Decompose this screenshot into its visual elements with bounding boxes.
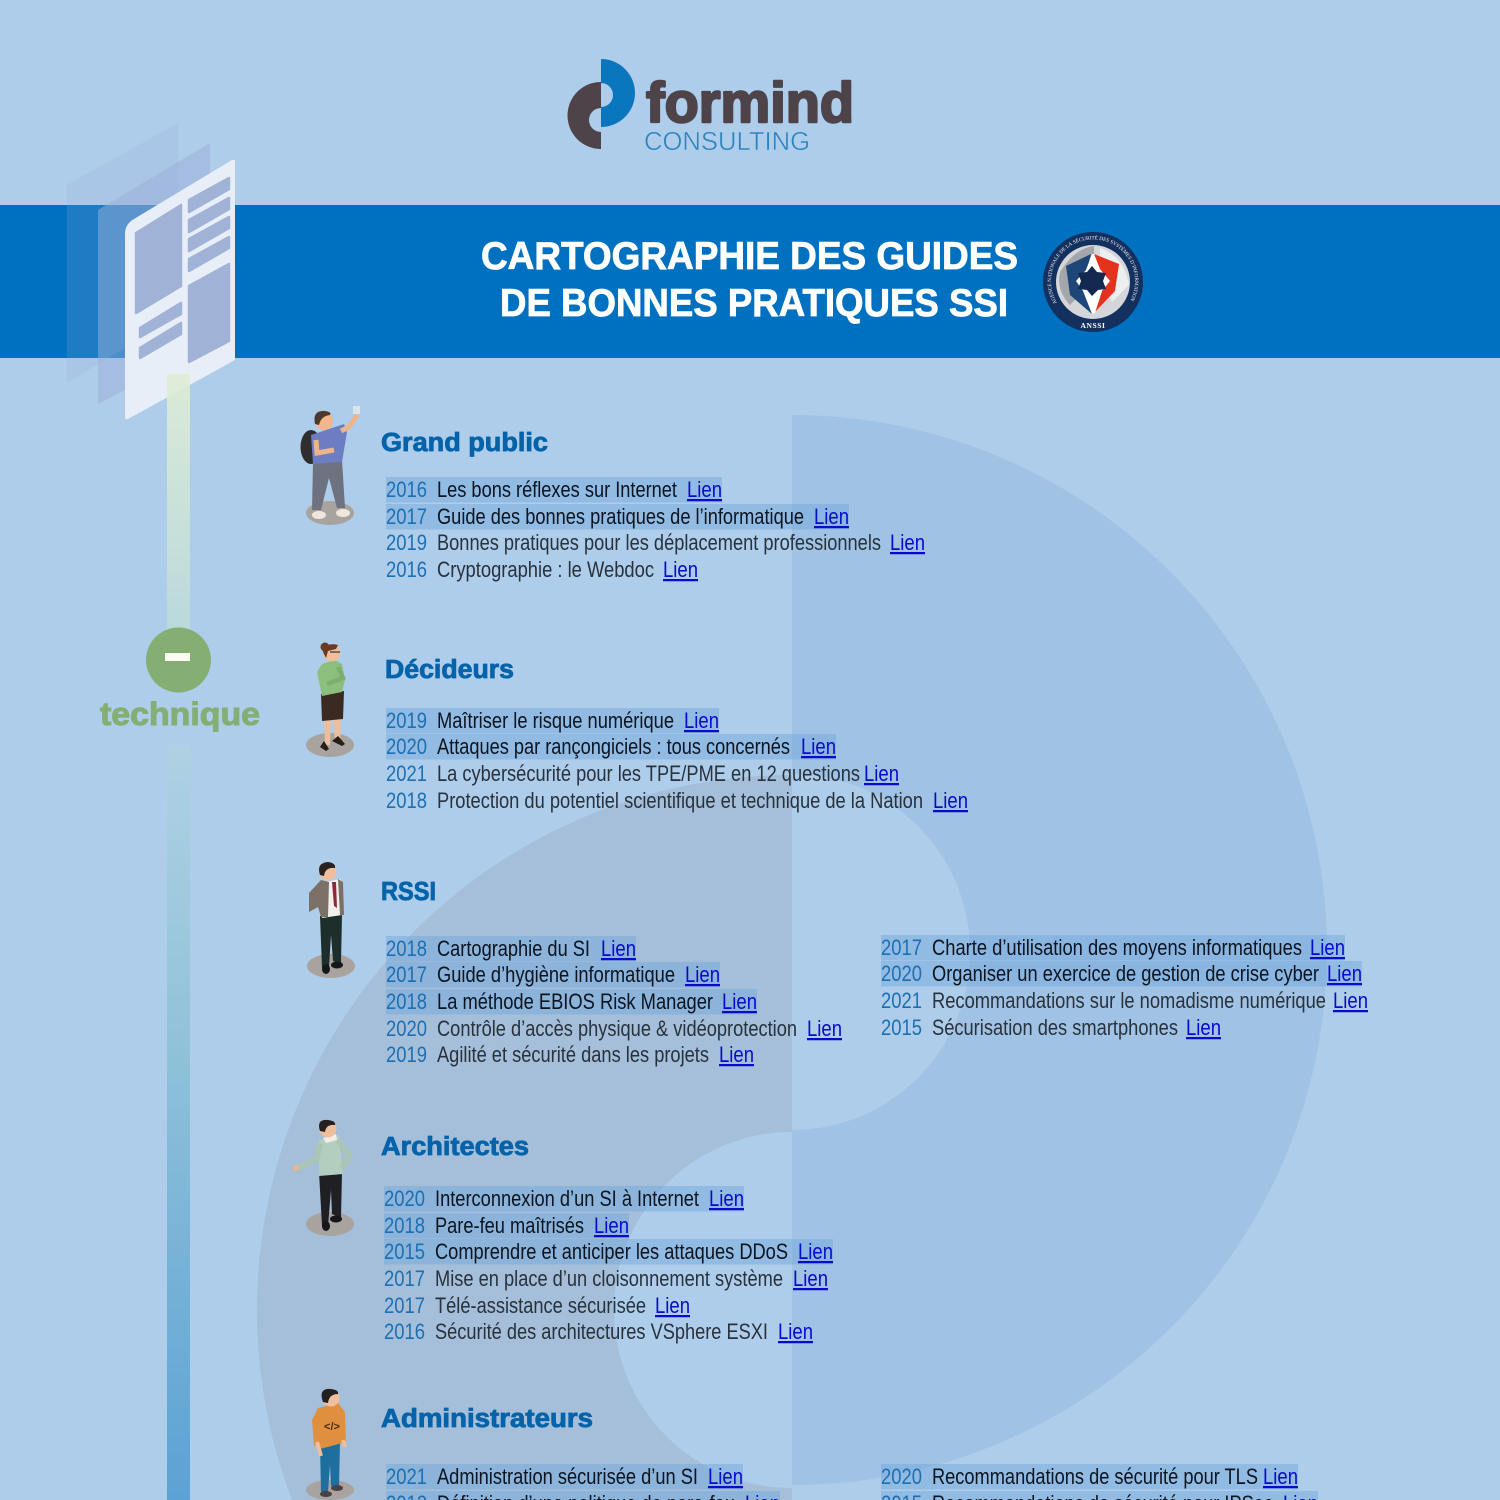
heading: Décideurs: Décideurs [385,656,514,684]
guides list: Décideurs [386,708,968,813]
figure: RSSI man in suit [307,862,355,978]
header band [0,205,1500,358]
logo wordmark: formind [646,71,854,135]
timeline bar: bottom segment [167,745,190,1500]
guides list: Architectes: 2017 [384,1293,425,1318]
guides list: Décideurs: Lien [684,708,719,733]
guides list: Grand public: 2016 [386,557,427,582]
guides list: Architectes: Lien [709,1186,744,1211]
guides list: Architectes: 2020 [384,1186,425,1211]
guides list: Décideurs: 2019 [386,708,427,733]
guides list: RSSI left column: 2018 [386,989,427,1014]
guides list: Administrateurs right column: 2020 [881,1464,922,1489]
guides list: Architectes: Comprendre et anticiper les attaques DDoS [435,1239,788,1264]
guides list: Grand public: Lien [890,530,925,555]
guides list: Administrateurs left column: Administration sécurisée d’un SI [437,1464,698,1489]
guides list: RSSI right column: 2015 [881,1015,922,1040]
guides list: RSSI left column [386,936,842,1067]
guides list: RSSI right column: Recommandations sur le nomadisme numérique [932,988,1326,1013]
guides list: Administrateurs right column [881,1464,1318,1500]
figure: grand public traveller [300,406,360,525]
guides list: Grand public: 2016 [386,477,427,502]
guides list: Grand public [386,477,925,582]
figure: décideuse [306,642,354,757]
guides list: Décideurs: 2018 [386,788,427,813]
guides list: RSSI right column: Lien [1333,988,1368,1013]
guides list: RSSI right column: Organiser un exercice de gestion de crise cyber [932,961,1319,986]
heading: Architectes: Architectes [381,1133,529,1161]
guides list: RSSI right column: 2020 [881,961,922,986]
guides list: Administrateurs right column: Lien [1263,1464,1298,1489]
guides list: Architectes: Pare-feu maîtrisés [435,1213,584,1238]
figure: architecte [293,1120,354,1236]
guides list: RSSI left column: Contrôle d’accès physique & vidéoprotection [437,1016,797,1041]
watermark: giant formind logo [257,415,1327,1500]
guides list: Grand public: 2017 [386,504,427,529]
guides list: Grand public: Lien [814,504,849,529]
guides list: RSSI right column: 2021 [881,988,922,1013]
heading: RSSI: RSSI [381,878,436,906]
label: technique: technique [100,696,260,732]
guides list: Grand public: Guide des bonnes pratiques de l’informatique [437,504,804,529]
marker: minus technique [146,628,211,692]
guides list: Architectes: 2018 [384,1213,425,1238]
guides list: RSSI left column: Lien [601,936,636,961]
guides list: RSSI left column: Lien [685,962,720,987]
guides list: Grand public: Cryptographie : le Webdoc [437,557,654,582]
guides list: Grand public: Les bons réflexes sur Internet [437,477,678,502]
guides list: Architectes [384,1186,833,1344]
guides list: RSSI left column: Lien [807,1016,842,1041]
icon: ANSSI seal: ANSSI [1080,321,1106,330]
guides list: Architectes: Lien [655,1293,690,1318]
guides list: RSSI right column: Sécurisation des smartphones [932,1015,1178,1040]
guides list: RSSI left column: 2020 [386,1016,427,1041]
title: CARTOGRAPHIE DES GUIDES [481,235,1018,278]
guides list: Grand public: 2019 [386,530,427,555]
guides list: Architectes: Lien [778,1319,813,1344]
guides list: Architectes: Mise en place d’un cloisonnement système [435,1266,783,1291]
guides list: RSSI left column: La méthode EBIOS Risk Manager [437,989,713,1014]
guides list: Décideurs: Lien [933,788,968,813]
guides list: Architectes: 2017 [384,1266,425,1291]
guides list: RSSI left column: 2017 [386,962,427,987]
icon: ANSSI seal: AGENCE NATIONALE DE LA SÉCURITÉ DES SYSTÈMES D’INFORMATION [1048,235,1138,304]
guides list: Architectes: 2015 [384,1239,425,1264]
guides list: Grand public: Lien [663,557,698,582]
figure: administrateur: </> [324,1421,340,1433]
guides list: RSSI right column: Charte d’utilisation des moyens informatiques [932,935,1302,960]
guides list: RSSI left column: Cartographie du SI [437,936,590,961]
figure: administrateur [306,1389,354,1500]
guides list: RSSI left column: 2018 [386,936,427,961]
guides list: RSSI left column: Guide d’hygiène informatique [437,962,675,987]
logo mark [568,59,635,149]
guides list: Administrateurs left column [386,1464,780,1500]
guides list: RSSI right column: Lien [1186,1015,1221,1040]
icon: stacked documents [67,123,235,419]
guides list: Administrateurs right column: Recommandations de sécurité pour TLS [932,1464,1258,1489]
icon: ANSSI seal [1043,232,1143,332]
guides list: Décideurs: Protection du potentiel scientifique et technique de la Nation [437,788,923,813]
heading: Administrateurs: Administrateurs [381,1405,593,1433]
guides list: Architectes: Lien [798,1239,833,1264]
guides list: RSSI right column: Lien [1327,961,1362,986]
guides list: Décideurs: Lien [801,734,836,759]
guides list: Grand public: Lien [687,477,722,502]
heading: Grand public: Grand public [381,429,548,457]
guides list: RSSI left column: 2019 [386,1042,427,1067]
guides list: Décideurs: La cybersécurité pour les TPE/PME en 12 questions [437,761,860,786]
guides list: Architectes: Interconnexion d’un SI à Internet [435,1186,700,1211]
guides list: Architectes: Lien [594,1213,629,1238]
guides list: Architectes: Télé-assistance sécurisée [435,1293,646,1318]
guides list: Décideurs: 2020 [386,734,427,759]
guides list: Décideurs: Lien [864,761,899,786]
title [481,235,1018,325]
logo subtitle: CONSULTING [644,128,810,156]
guides list: Décideurs: Maîtriser le risque numérique [437,708,674,733]
guides list: Administrateurs left column: 2021 [386,1464,427,1489]
guides list: RSSI right column: 2017 [881,935,922,960]
guides list: RSSI left column: Agilité et sécurité dans les projets [437,1042,709,1067]
guides list: RSSI right column [881,935,1368,1040]
timeline bar: top segment [167,374,190,630]
guides list: Décideurs: 2021 [386,761,427,786]
guides list: Architectes: 2016 [384,1319,425,1344]
guides list: Décideurs: Attaques par rançongiciels : tous concernés [437,734,790,759]
guides list: RSSI left column: Lien [722,989,757,1014]
title: DE BONNES PRATIQUES SSI [500,282,1008,325]
guides list: Grand public: Bonnes pratiques pour les déplacement professionnels [437,530,881,555]
guides list: RSSI right column: Lien [1310,935,1345,960]
logo: formind consulting [568,59,854,156]
guides list: Architectes: Sécurité des architectures VSphere ESXI [435,1319,768,1344]
guides list: Administrateurs left column: Lien [708,1464,743,1489]
guides list: RSSI left column: Lien [719,1042,754,1067]
guides list: Architectes: Lien [793,1266,828,1291]
